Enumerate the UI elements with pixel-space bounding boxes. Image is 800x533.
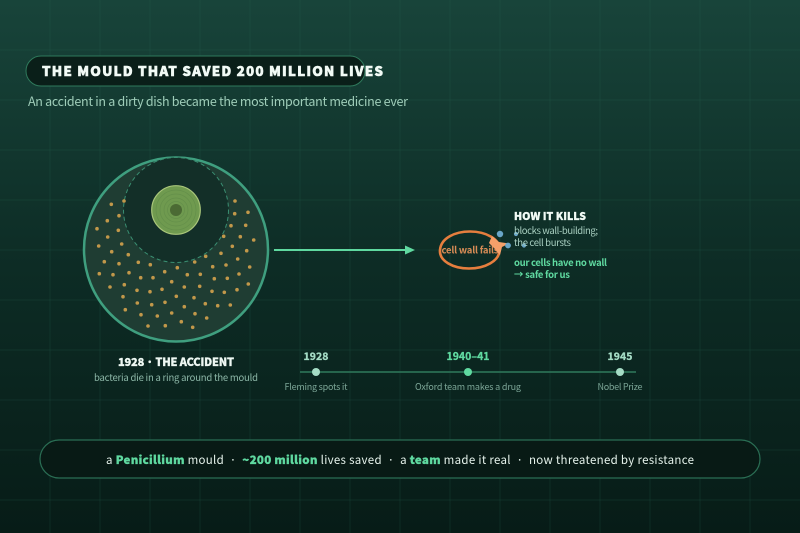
1940-41 milestone: Oxford team makes a drug	[415, 380, 521, 393]
how it kills text: blocks wall-building;	[514, 223, 598, 237]
title: THE MOULD THAT SAVED 200 MILLION LIVES	[42, 60, 383, 80]
accident caption: bacteria die in a ring around the mould	[94, 370, 258, 384]
1940-41 milestone: 1940–41	[446, 349, 490, 364]
petri dish illustration	[84, 158, 268, 342]
penicillin molecules	[497, 231, 526, 248]
1945 milestone	[598, 349, 642, 393]
accident caption	[94, 354, 258, 384]
subtitle: An accident in a dirty dish became the most important medicine ever	[28, 91, 408, 110]
1928 milestone: 1928	[304, 349, 328, 364]
summary banner	[40, 440, 760, 478]
1940-41 milestone	[415, 349, 521, 393]
how it kills text: the cell bursts	[514, 235, 572, 249]
how it kills text: → safe for us	[514, 267, 570, 281]
1928 milestone	[284, 349, 348, 393]
arrow	[274, 246, 415, 254]
clear zone	[124, 158, 228, 262]
1928 milestone: Fleming spots it	[284, 380, 348, 393]
timeline	[284, 349, 642, 393]
how it kills text: HOW IT KILLS	[514, 209, 586, 224]
how it kills text	[514, 209, 607, 281]
how it kills text: our cells have no wall	[514, 255, 607, 269]
accident caption: 1928 · THE ACCIDENT	[118, 354, 234, 370]
bacterium wall	[440, 232, 500, 268]
cell wall label: cell wall fails	[442, 242, 499, 256]
mould colony	[152, 186, 200, 234]
1945 milestone: 1945	[608, 349, 632, 364]
burst	[489, 236, 509, 255]
title	[26, 56, 383, 86]
bacteria colonies	[95, 199, 256, 329]
dish	[84, 158, 268, 342]
1945 milestone: Nobel Prize	[598, 380, 642, 393]
cell wall diagram	[440, 231, 526, 268]
summary banner: a Penicillium mould · ~200 million lives saved · a team made it real · now threatened by resistance	[106, 452, 694, 468]
